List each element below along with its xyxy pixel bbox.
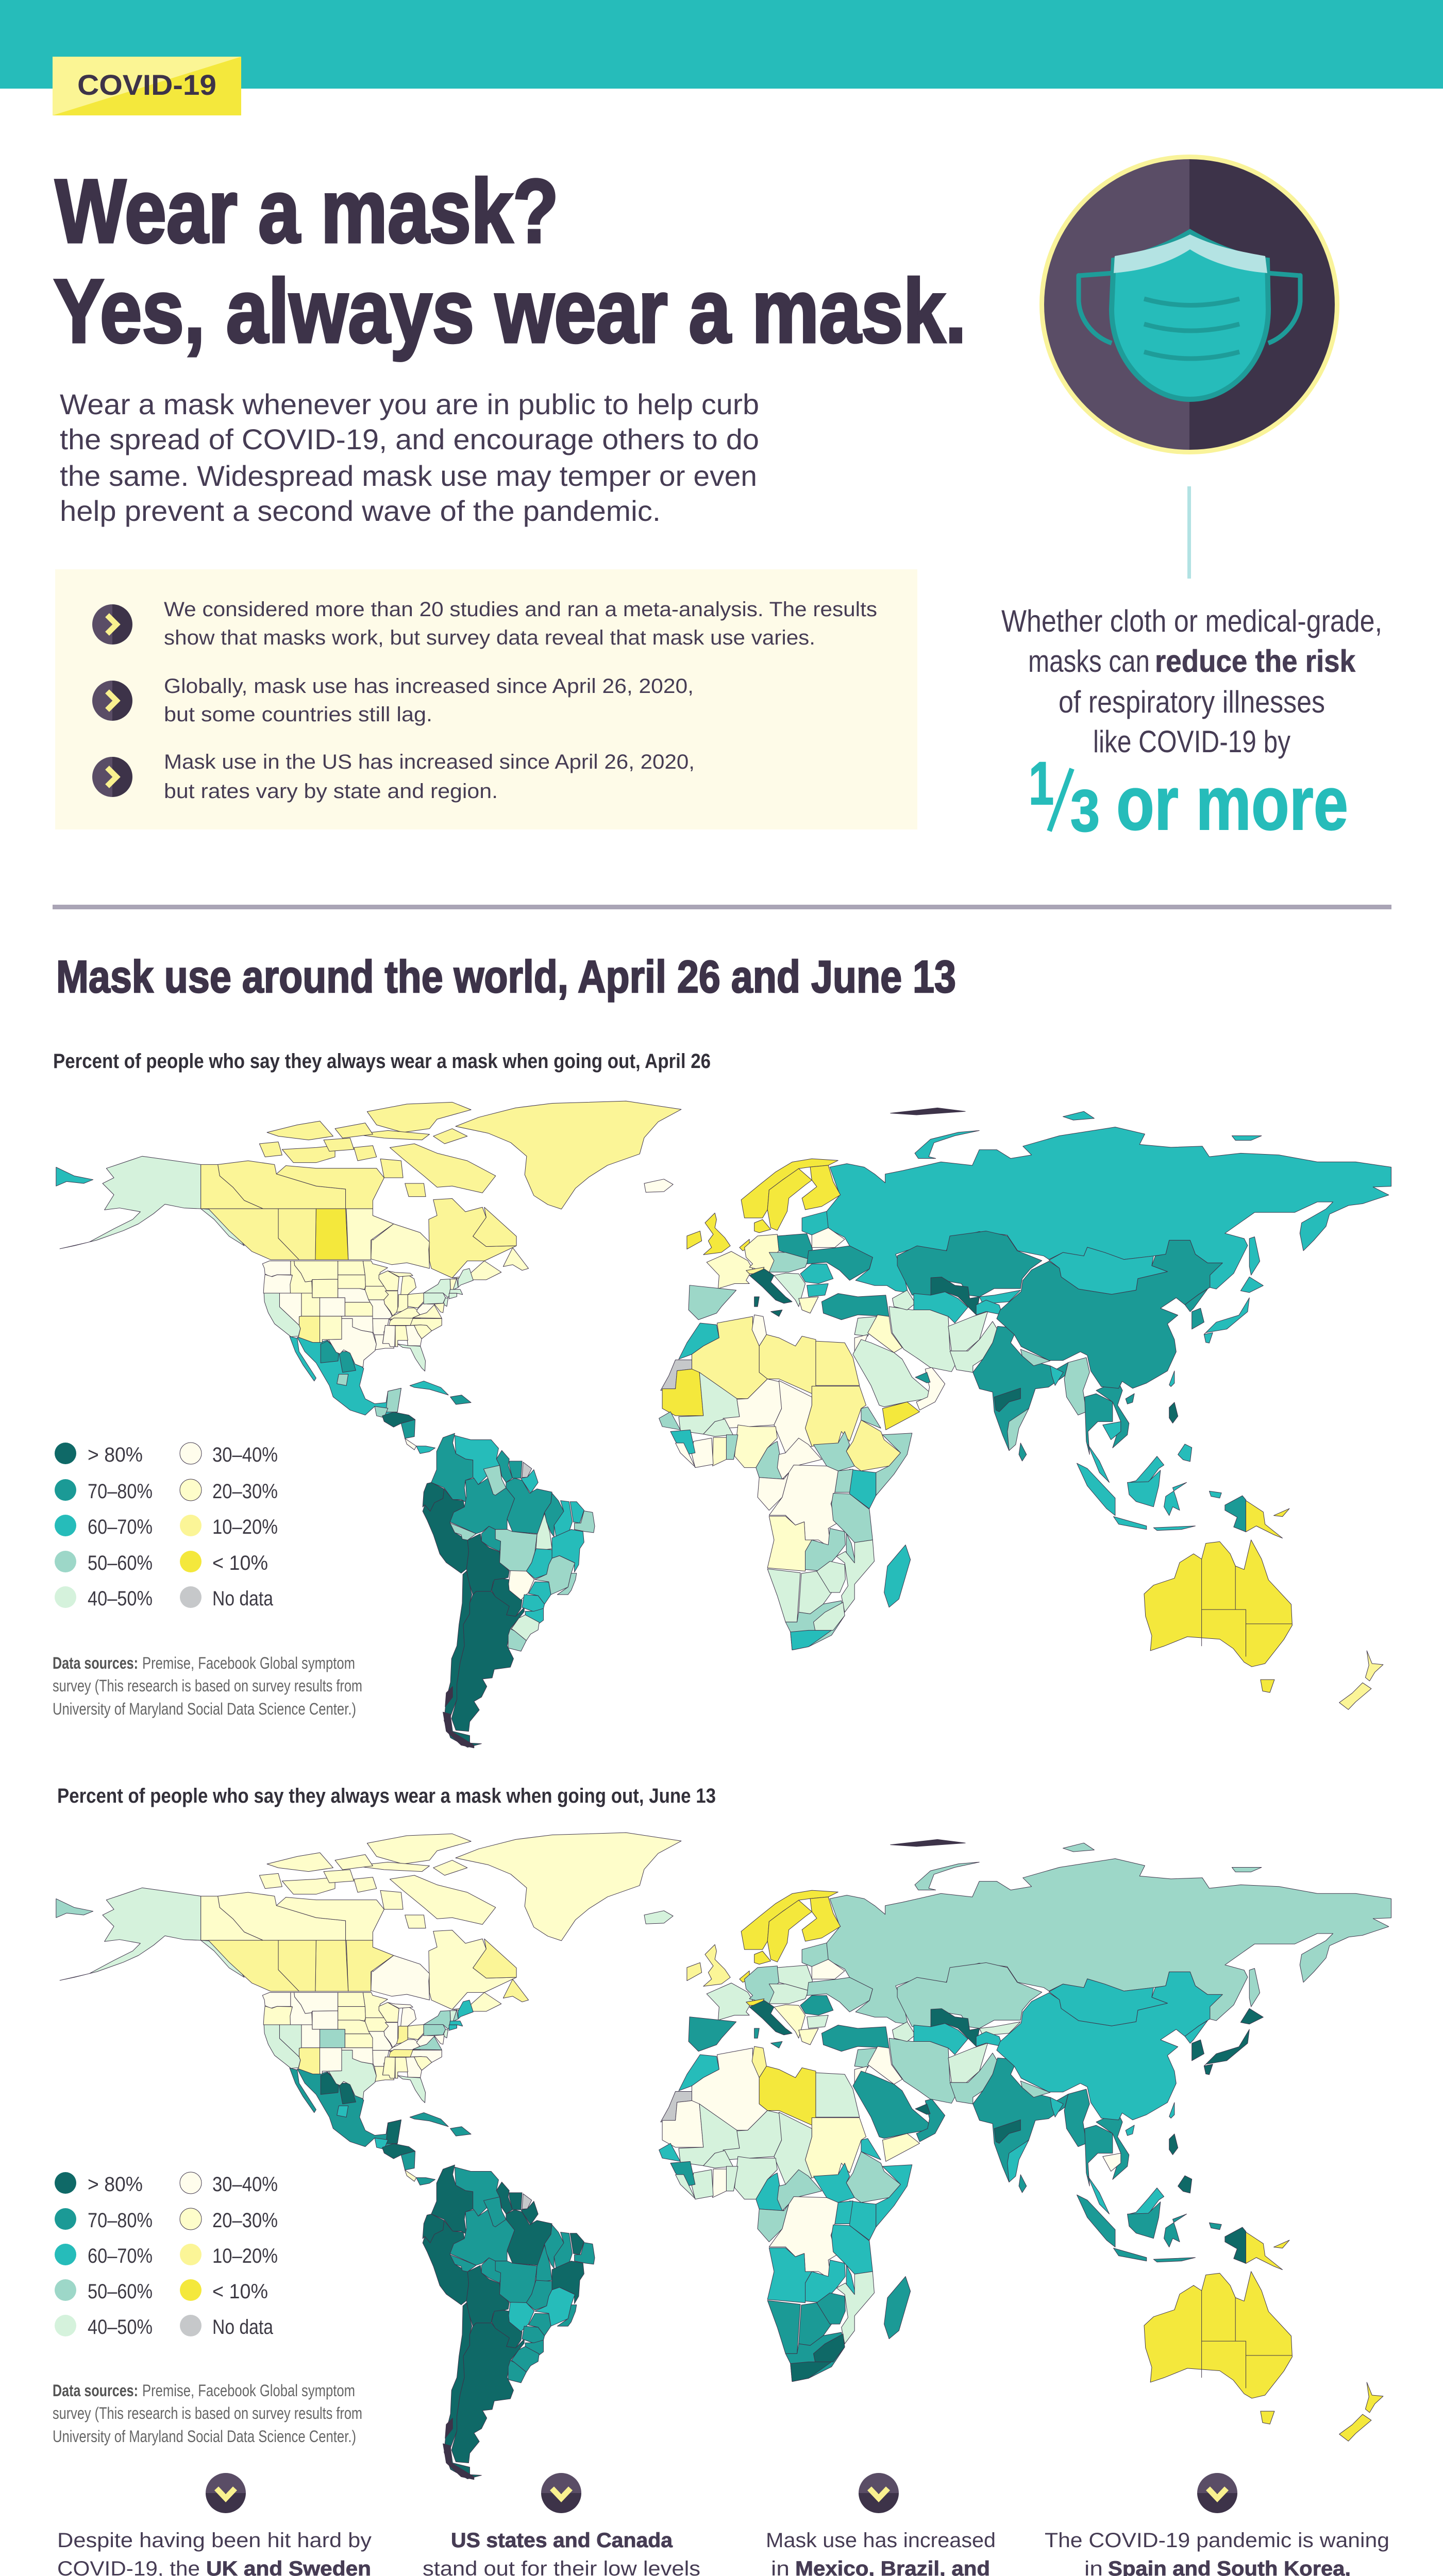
legend: June map	[55, 2172, 278, 2338]
legend: April map: 70–80%	[88, 1480, 153, 1503]
callout: risk reduction: Whether cloth or medical-grade,	[1001, 604, 1382, 638]
legend: April map	[55, 1443, 278, 1610]
takeaway column 1	[57, 2473, 372, 2576]
icon: chevron bullet	[92, 681, 132, 721]
data sources: June map: survey (This research is based on survey results from	[53, 2404, 362, 2422]
legend: April map: 40–50%	[88, 1587, 153, 1610]
title	[54, 161, 966, 362]
callout: risk reduction: 3	[1070, 778, 1100, 844]
legend: June map: 10–20%	[212, 2245, 278, 2267]
intro text: the same. Widespread mask use may temper or even	[60, 460, 757, 492]
legend: June map: 70–80%	[88, 2209, 153, 2232]
finding 2: but some countries still lag.	[164, 703, 432, 726]
data sources: April map: Data sources:	[53, 1654, 138, 1672]
takeaway text 2	[423, 2529, 700, 2576]
icon: down chevron	[859, 2473, 899, 2513]
legend: April map: 60–70%	[88, 1516, 153, 1538]
legend: April map: 20–30%	[212, 1480, 278, 1503]
top band	[0, 0, 1443, 89]
icon: down chevron	[541, 2473, 581, 2513]
data sources: June map: Premise, Facebook Global symptom	[142, 2381, 355, 2400]
callout: risk reduction: like COVID-19 by	[1093, 724, 1290, 759]
takeaway column 4	[1045, 2473, 1391, 2576]
legend: June map: 40–50%	[88, 2316, 153, 2338]
intro text: Wear a mask whenever you are in public to help curb	[60, 388, 759, 420]
finding 2: Globally, mask use has increased since April 26, 2020,	[164, 675, 694, 698]
legend: April map: 10–20%	[212, 1516, 278, 1538]
takeaway column 2	[423, 2473, 700, 2576]
connector line	[1187, 486, 1191, 579]
data sources: June map: University of Maryland Social Data Science Center.)	[53, 2427, 356, 2446]
takeaway text 1	[57, 2529, 372, 2576]
world map: June 13	[56, 1833, 1391, 2480]
icon: down chevron	[1197, 2473, 1237, 2513]
legend: April map: No data	[212, 1587, 274, 1610]
legend: June map: 30–40%	[212, 2173, 278, 2196]
icon: face mask	[1039, 155, 1339, 454]
finding 2	[164, 675, 694, 726]
callout: risk reduction: reduce the risk	[1155, 644, 1356, 679]
takeaway text 1: Despite having been hit hard by	[57, 2529, 372, 2552]
finding 3	[164, 751, 695, 803]
legend: April map: > 80%	[88, 1444, 143, 1466]
legend: April map: 50–60%	[88, 1552, 153, 1574]
panel: key findings	[55, 569, 917, 829]
data sources: April map: survey (This research is based on survey results from	[53, 1676, 362, 1695]
legend: June map: < 10%	[212, 2280, 268, 2303]
title: Yes, always wear a mask.	[54, 261, 966, 362]
finding 3: but rates vary by state and region.	[164, 780, 498, 803]
takeaway text 3: Mask use has increased	[766, 2529, 996, 2552]
subtitle: June map: Percent of people who say they always wear a mask when going out, June 13	[57, 1785, 716, 1807]
icon: down chevron	[206, 2473, 246, 2513]
finding 3: Mask use in the US has increased since April 26, 2020,	[164, 751, 695, 773]
title: Wear a mask?	[55, 161, 559, 262]
takeaway text 2: US states and Canada	[451, 2529, 673, 2552]
finding 1: show that masks work, but survey data reveal that mask use varies.	[164, 626, 815, 649]
legend: June map: > 80%	[88, 2173, 143, 2196]
callout: risk reduction: of respiratory illnesses	[1059, 685, 1325, 719]
takeaway column 3	[766, 2473, 996, 2576]
legend: April map: < 10%	[212, 1552, 268, 1574]
data sources: June map: Data sources:	[53, 2381, 138, 2400]
data sources: April map: Premise, Facebook Global symptom	[142, 1654, 355, 1672]
legend: June map: 60–70%	[88, 2245, 153, 2267]
callout: risk reduction: 1	[1029, 750, 1054, 818]
heading: world section: Mask use around the world, April 26 and June 13	[56, 951, 956, 1002]
legend: June map: 20–30%	[212, 2209, 278, 2232]
callout: risk reduction: or more	[1116, 761, 1348, 846]
legend: June map: 50–60%	[88, 2280, 153, 2303]
legend: April map: 30–40%	[212, 1444, 278, 1466]
takeaway text 4: The COVID-19 pandemic is waning	[1045, 2529, 1389, 2552]
data sources: April map	[53, 1654, 362, 1718]
finding 1: We considered more than 20 studies and ran a meta-analysis. The results	[164, 598, 877, 621]
finding 1	[164, 598, 877, 649]
callout: risk reduction: masks can	[1028, 644, 1150, 679]
legend: June map: No data	[212, 2316, 274, 2338]
icon: chevron bullet	[92, 604, 132, 645]
data sources: June map	[53, 2381, 362, 2446]
tag: COVID-19: COVID-19	[77, 69, 216, 101]
tag: COVID-19	[53, 57, 241, 115]
takeaway text 4	[1045, 2529, 1391, 2576]
data sources: April map: University of Maryland Social Data Science Center.)	[53, 1700, 356, 1718]
icon: chevron bullet	[92, 757, 132, 797]
callout: risk reduction	[1001, 604, 1382, 846]
world map: April 26	[56, 1101, 1391, 1748]
intro text: help prevent a second wave of the pandemic.	[60, 495, 661, 527]
intro text: the spread of COVID-19, and encourage others to do	[60, 423, 759, 455]
subtitle: April map: Percent of people who say they always wear a mask when going out, April 26	[53, 1050, 711, 1073]
takeaway text 3	[766, 2529, 996, 2576]
intro text	[60, 388, 759, 527]
